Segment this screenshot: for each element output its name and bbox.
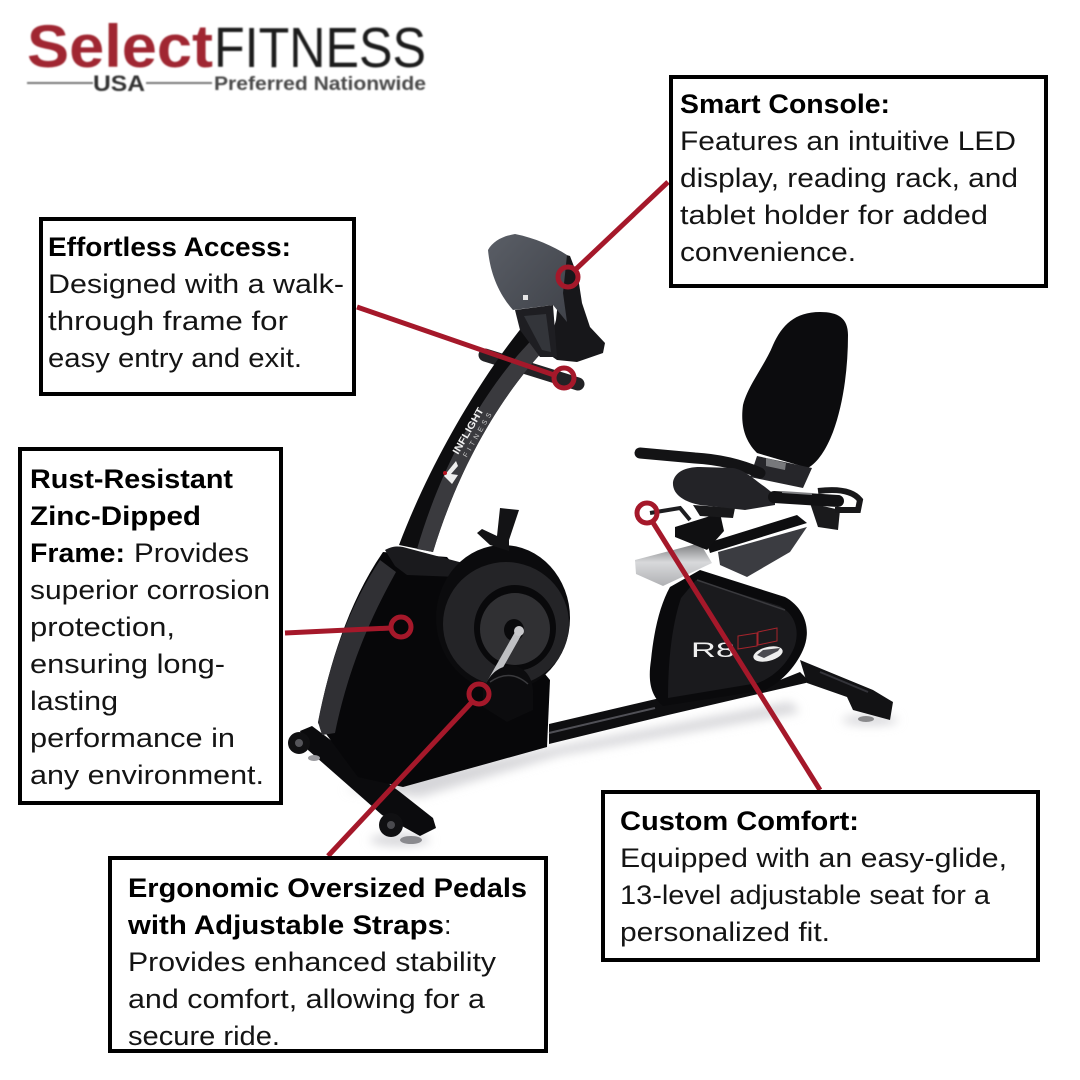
console column with logo xyxy=(399,320,542,552)
text: rust-resistant description: any environment. xyxy=(30,760,264,790)
heading: rust-resistant frame xyxy=(30,464,233,568)
text: custom comfort description: 13-level adjustable seat for a xyxy=(620,880,991,910)
text: ergonomic pedals description: : xyxy=(444,910,452,940)
text: rust-resistant description: performance in xyxy=(30,723,235,753)
rear stabilizer foot xyxy=(800,660,893,722)
logo: Select Fitness USA: Select xyxy=(27,13,213,80)
main resistance housing xyxy=(318,508,570,787)
text: rust-resistant description: superior corrosion xyxy=(30,575,270,605)
panel: custom comfort xyxy=(603,792,1038,960)
pedal with strap xyxy=(483,665,533,722)
logo: Select Fitness USA: FITNESS xyxy=(214,16,426,80)
text: ergonomic pedals description: and comfort, allowing for a xyxy=(128,984,486,1014)
connector: custom comfort xyxy=(637,503,820,790)
flywheel cover xyxy=(436,545,570,691)
front stabilizer with wheels xyxy=(288,726,436,844)
text: rust-resistant description: protection, xyxy=(30,612,175,642)
heading: smart console: Smart Console: xyxy=(680,89,890,119)
text: smart console description: tablet holder for added xyxy=(680,200,988,230)
heading: rust-resistant frame: Frame: xyxy=(30,538,125,568)
text: effortless access description: easy entry and exit. xyxy=(48,343,302,373)
heading: custom comfort: Custom Comfort: xyxy=(620,806,859,836)
column brand text: FITNESS xyxy=(462,412,494,459)
heading: rust-resistant frame: Zinc-Dipped xyxy=(30,501,201,531)
panel: ergonomic pedals xyxy=(110,858,546,1051)
text: smart console description: Features an intuitive LED xyxy=(680,126,1016,156)
panel: rust-resistant frame xyxy=(20,449,281,803)
logo: Select Fitness USA: USA xyxy=(93,71,145,96)
seat back xyxy=(742,312,848,488)
text: effortless access description xyxy=(48,269,344,373)
heading: rust-resistant frame: Rust-Resistant xyxy=(30,464,233,494)
heading: ergonomic pedals: with Adjustable Straps xyxy=(127,910,444,940)
recumbent bike illustration xyxy=(288,234,898,846)
seat slide rail and brace xyxy=(635,505,807,586)
text: smart console description: display, reading rack, and xyxy=(680,163,1018,193)
handlebar xyxy=(485,355,578,384)
text: rust-resistant description: lasting xyxy=(30,686,118,716)
model label: R8 xyxy=(691,639,735,662)
crank arm xyxy=(488,632,519,687)
text: ergonomic pedals description: Provides enhanced stability xyxy=(128,947,497,977)
heading: ergonomic pedals xyxy=(127,873,527,940)
floor shadow xyxy=(345,702,898,846)
heading: ergonomic pedals: Ergonomic Oversized Pedals xyxy=(128,873,527,903)
connector: rust-resistant frame xyxy=(285,617,411,637)
logo: Select Fitness USA: Preferred Nationwide xyxy=(214,74,426,95)
text: effortless access description: Designed with a walk- xyxy=(48,269,344,299)
column brand text xyxy=(451,406,494,460)
text: custom comfort description: Equipped with an easy-glide, xyxy=(620,843,1007,873)
console display xyxy=(488,234,605,362)
connector: smart console xyxy=(558,182,668,287)
column brand text: INFLIGHT xyxy=(451,406,487,456)
text: ergonomic pedals description xyxy=(128,910,497,1051)
text: ergonomic pedals description: secure ride. xyxy=(128,1021,280,1051)
panel: smart console xyxy=(671,77,1046,286)
seat cushion and handles xyxy=(640,453,860,530)
text: custom comfort description xyxy=(620,843,1007,947)
rear pedestal housing xyxy=(650,570,807,706)
text: smart console description: convenience. xyxy=(680,237,856,267)
text: rust-resistant description: ensuring long- xyxy=(30,649,225,679)
heading: effortless access: Effortless Access: xyxy=(48,232,291,262)
panel: effortless access xyxy=(41,219,354,394)
logo: Select Fitness USA xyxy=(27,13,426,96)
rear pedal strap xyxy=(477,508,519,551)
main floor rail xyxy=(549,672,810,744)
connector: pedals xyxy=(328,684,489,856)
connector: effortless access xyxy=(357,307,574,388)
text: effortless access description: through frame for xyxy=(48,306,288,336)
text: smart console description xyxy=(680,126,1018,267)
text: rust-resistant description xyxy=(30,538,270,790)
text: custom comfort description: personalized fit. xyxy=(620,917,830,947)
text: rust-resistant description: Provides xyxy=(134,538,249,568)
callout connector lines xyxy=(285,182,820,856)
